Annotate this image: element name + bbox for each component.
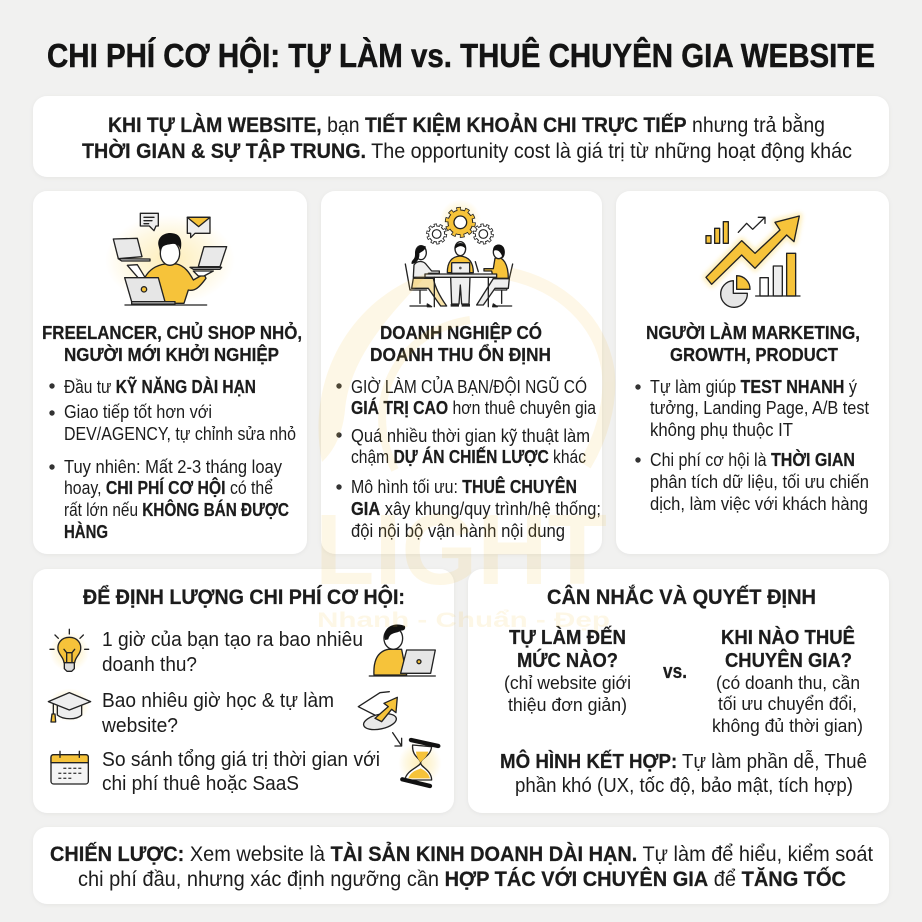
questions text [101, 629, 380, 795]
watermark logo: Nhanh - Chuẩn - Đẹp [317, 609, 610, 632]
heading: marketing: NGƯỜI LÀM MARKETING, [646, 322, 860, 343]
bullets: business: đội nội bộ vận hành nội dung [351, 521, 565, 541]
icon: growth chart [706, 216, 800, 307]
questions text: So sánh tổng giá trị thời gian với [102, 749, 380, 771]
icon: team meeting with gears [405, 199, 513, 307]
column: hire expert: (có doanh thu, cần [716, 673, 860, 693]
column: do it yourself [504, 626, 631, 715]
heading: business [370, 322, 551, 365]
heading: freelancer: NGƯỜI MỚI KHỞI NGHIỆP [64, 344, 279, 365]
column: do it yourself: thiệu đơn giản) [508, 695, 627, 715]
watermark logo [315, 272, 610, 632]
hybrid model: phần khó (UX, tốc độ, bảo mật, tích hợp) [515, 774, 853, 797]
bullets: business: chậm DỰ ÁN CHIẾN LƯỢC khác [351, 446, 586, 467]
bullets: marketing: không phụ thuộc IT [650, 420, 793, 440]
hybrid model [500, 749, 867, 797]
column: do it yourself: TỰ LÀM ĐẾN [509, 626, 626, 649]
questions text: doanh thu? [102, 654, 197, 676]
panel: strategy: CHIẾN LƯỢC: Xem website là TÀI SẢN KINH DOANH DÀI HẠN. Tự làm để hiểu, kiểm soát [50, 841, 873, 866]
bullets: marketing: phân tích dữ liệu, tối ưu chiến [650, 472, 869, 492]
bullets: marketing: Tự làm giúp TEST NHANH ý [650, 377, 857, 397]
panel: strategy [33, 827, 889, 904]
column: do it yourself: (chỉ website giới [504, 673, 631, 693]
bullets: business: GIA xây khung/quy trình/hệ thống; [351, 499, 601, 519]
bullets: freelancer [49, 376, 296, 542]
hybrid model: MÔ HÌNH KẾT HỢP: Tự làm phần dễ, Thuê [500, 749, 867, 773]
bullets: freelancer: hoay, CHI PHÍ CƠ HỘI có thể [64, 477, 273, 498]
versus: vs. [663, 661, 687, 683]
panel: decide [468, 569, 889, 813]
bullets: business: GIÁ TRỊ CAO hơn thuê chuyên gia [351, 397, 597, 418]
column: hire expert: tối ưu chuyển đổi, [718, 694, 857, 714]
questions text: website? [101, 715, 178, 737]
panel: intro: KHI TỰ LÀM WEBSITE, bạn TIẾT KIỆM KHOẢN CHI TRỰC TIẾP nhưng trả bằng [108, 112, 825, 137]
panel: quantify [33, 569, 454, 813]
questions text: 1 giờ của bạn tạo ra bao nhiêu [102, 629, 363, 651]
heading: quantify: ĐỂ ĐỊNH LƯỢNG CHI PHÍ CƠ HỘI: [83, 585, 405, 609]
bullets: business: Quá nhiều thời gian kỹ thuật làm [351, 426, 590, 446]
bullets: freelancer: Giao tiếp tốt hơn với [64, 402, 212, 422]
panel: intro: THỜI GIAN & SỰ TẬP TRUNG. The opportunity cost là giá trị từ những hoạt động khác [82, 138, 852, 163]
heading: business: DOANH NGHIỆP CÓ [380, 322, 542, 343]
heading: business: DOANH THU ỔN ĐỊNH [370, 344, 551, 365]
bullets: business [336, 376, 601, 541]
panel: business [321, 191, 602, 554]
questions text: chi phí thuê hoặc SaaS [102, 773, 299, 795]
column: do it yourself: MỨC NÀO? [517, 648, 618, 672]
icon: multitasking freelancer [105, 213, 235, 305]
heading: decide: CÂN NHẮC VÀ QUYẾT ĐỊNH [547, 585, 816, 609]
column: hire expert [712, 625, 863, 736]
bullets: marketing [635, 377, 869, 514]
bullets: freelancer: HÀNG [64, 521, 108, 542]
heading: freelancer [42, 322, 302, 365]
panel: marketing [616, 191, 889, 554]
bullets: marketing: tưởng, Landing Page, A/B test [650, 398, 869, 418]
bullets: freelancer: Đầu tư KỸ NĂNG DÀI HẠN [64, 376, 256, 397]
heading: freelancer: FREELANCER, CHỦ SHOP NHỎ, [42, 322, 302, 343]
bullets: marketing: Chi phí cơ hội là THỜI GIAN [650, 449, 855, 470]
bullets: freelancer: rất lớn nếu KHÔNG BÁN ĐƯỢC [64, 499, 289, 520]
panel: intro [33, 96, 889, 177]
heading: marketing [646, 322, 860, 365]
bullets: marketing: dịch, làm việc với khách hàng [650, 494, 868, 514]
bullets: freelancer: Tuy nhiên: Mất 2-3 tháng loay [64, 457, 282, 477]
panel: freelancer [33, 191, 307, 554]
panel: strategy: chi phí đầu, nhưng xác định ngưỡng cần HỢP TÁC VỚI CHUYÊN GIA để TĂNG TỐC [78, 865, 846, 891]
watermark logo: LIGHT [315, 494, 607, 606]
bullets: freelancer: DEV/AGENCY, tự chỉnh sửa nhỏ [64, 424, 296, 444]
column: hire expert: không đủ thời gian) [712, 716, 863, 736]
column: hire expert: CHUYÊN GIA? [725, 648, 852, 672]
icons and questions [48, 624, 442, 786]
bullets: business: Mô hình tối ưu: THUÊ CHUYÊN [351, 476, 577, 497]
bullets: business: GIỜ LÀM CỦA BẠN/ĐỘI NGŨ CÓ [351, 376, 587, 397]
column: hire expert: KHI NÀO THUÊ [721, 625, 855, 649]
questions text: Bao nhiêu giờ học & tự làm [102, 690, 334, 712]
heading: marketing: GROWTH, PRODUCT [670, 344, 839, 365]
